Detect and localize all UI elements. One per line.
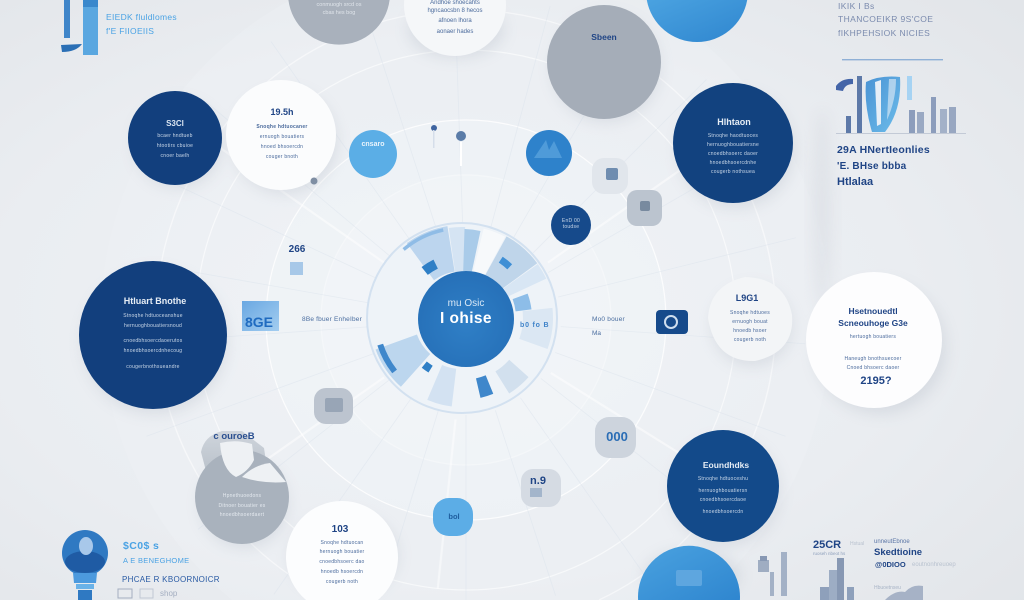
circle: top white: aonaer hades: [437, 29, 473, 35]
label: right spoke: Mo0 bouer: [592, 316, 626, 323]
circle: white right big: Haneugh bnothsuecoer: [844, 356, 902, 362]
text: bottom right stat: Hbuoetnseu: [874, 585, 901, 591]
circle: gray lower left: Ditnoer bouatier es: [218, 503, 266, 509]
label: right spoke: Ma: [592, 330, 601, 337]
circle: dark right top: cougerb nothsuea: [711, 169, 755, 175]
icon: top left bars: [61, 0, 98, 55]
circle: dark left big: cnoedbhsoercdaoerutos: [124, 338, 183, 344]
circle: dark left big: cougerbnothsueandre: [126, 364, 180, 370]
text: bottom right stat: @0DIOO: [875, 560, 906, 569]
circle: gray lower left: [195, 431, 289, 544]
hub heading: I ohise: [440, 310, 492, 327]
text: bottom left: A E BENEGHOME: [123, 556, 189, 565]
text: bottom left: PHCAE R KBOORNOICR: [122, 575, 220, 584]
icon: glass tile bottom: [521, 469, 561, 507]
circle: dark left top: cnoer baelh: [161, 153, 189, 159]
circle: dark right top: hnoedbhsoercdnhe: [710, 160, 756, 166]
circle: dark lower right: cnoedbhsoercdaoe: [700, 497, 746, 503]
label: left spoke: 8Be fbuer EnheIber: [302, 316, 363, 323]
text: bottom left: shop: [160, 589, 178, 598]
icon: small pins: [310, 125, 466, 184]
text: top right: fIKHPEHSIOK NICIES: [838, 28, 930, 38]
circle: dark lower right: [667, 430, 779, 542]
circle: white bottom: cnoedbhsoerc dao: [319, 559, 365, 565]
circle: blue bottom partial: [638, 546, 740, 600]
icon: glass tile right lower: [595, 417, 636, 458]
tile: left blue 8GE: 8GE: [245, 314, 273, 330]
circle: white upper left: couger bnoth: [266, 154, 298, 160]
circle: white bottom: hernuogh bouatier: [320, 549, 365, 555]
text: bottom left: [118, 540, 220, 598]
text: bottom right stat: [813, 539, 956, 591]
circle: small blue upper right: [526, 130, 572, 176]
circle: white right big: hertuogh bouatiers: [850, 334, 896, 340]
text: right stat: Htlalaa: [837, 176, 874, 188]
circle: top white: hgncaocsbn 8 hecos: [427, 8, 483, 14]
circle: top gray partial: cbas hes bog: [323, 10, 355, 16]
text: top left: [106, 12, 177, 36]
chart: bottom right skyline: [758, 552, 923, 600]
circle: dark lower right: hnoedbhsoercdn: [703, 509, 743, 515]
circle: white upper left: [226, 80, 336, 190]
text: top right: [838, 1, 933, 38]
text: bottom right stat: Skedtioine: [874, 547, 922, 558]
circle: white upper left: ernuogh bouatiers: [260, 134, 305, 140]
circle: small blue left: cnsaro: [362, 141, 384, 148]
circle: white upper left: hnoed bhsoercdn: [261, 144, 303, 150]
circle: white bottom: [286, 501, 398, 600]
stat: left label: [289, 244, 306, 275]
label: 19.5h: [270, 107, 294, 117]
right side shadow of backdrop: [812, 110, 832, 310]
cutout right: [242, 463, 286, 482]
circle: dark left top: [128, 91, 222, 185]
hub wedges: [335, 191, 589, 445]
hub ring: [367, 223, 557, 413]
text: top left: f'E FIIOEIIS: [106, 26, 154, 36]
text: bottom right stat: ruoseh nbeot hs: [813, 551, 846, 556]
label: c ouroeB: [213, 431, 255, 442]
label: S3Cl: [166, 119, 184, 128]
label: Hsetnouedtl: [848, 306, 898, 316]
radial network backdrop: [101, 0, 831, 600]
circle: dark left big: hernuoghbouatiersnoud: [124, 323, 182, 329]
callout: white right small: [708, 277, 792, 361]
icon: glass tile right lower: 000: [606, 429, 628, 444]
icon: dark right tile: [656, 310, 688, 334]
circle: dark left top: htootirs cbuioe: [157, 143, 193, 149]
circle: small blue left: [349, 130, 397, 178]
circle: white right big: Scneouhoge G3e: [838, 318, 908, 328]
text: top right: IKIK I Bs: [838, 1, 875, 11]
circle: dark lower right: Stnoqhe hdtuoceshu: [698, 476, 748, 482]
chart: top right bars: [836, 76, 966, 134]
text: right stat: 29A HNertIeonlies: [837, 144, 930, 156]
text: bottom right stat: 25CR: [813, 539, 841, 551]
circle: gray lower left: hnoedbhsoerdaert: [220, 512, 265, 518]
hub side labels: b0 fo B: [520, 322, 549, 329]
circle: top white: afnoen lhora: [438, 18, 472, 24]
circle: dark right top: Stnoqhe haodtuoces: [708, 133, 758, 139]
label: Htluart Bnothe: [124, 296, 186, 306]
circle: white bottom: hnoedb hsoercdn: [321, 569, 363, 575]
circle: small blue bottom: bol: [448, 512, 460, 521]
circle: top gray partial: conmuogh srcd os: [317, 2, 362, 8]
circle: small dark: toudse: [563, 224, 579, 230]
circle: white bottom: cougerb noth: [326, 579, 358, 585]
circle: dark left big: [79, 261, 227, 409]
circle: small blue bottom: [433, 498, 473, 536]
circle: dark right top: [673, 83, 793, 203]
text: bottom right stat: eoutnonhreuoep: [912, 562, 956, 568]
hub title: mu Osic: [448, 298, 484, 309]
icon: glass tiles: [592, 158, 662, 226]
text: top right: THANCOEIKR 9S'COE: [838, 14, 933, 24]
circle: top blue partial: [647, 0, 747, 42]
text: bottom left: $C0$ s: [123, 540, 159, 552]
circle: dark left big: hnoedbhsoercdnhecoug: [124, 348, 182, 354]
gray body: [195, 450, 289, 544]
icon: lightbulb: [62, 530, 108, 600]
tile: left blue 8GE: [242, 301, 279, 331]
label: Hlhtaon: [717, 117, 751, 127]
label: Eoundhdks: [703, 460, 749, 470]
text: right stat: 'E. BHse bbba: [837, 161, 907, 172]
circle: top gray seem: [547, 5, 661, 119]
text: top left: EIEDK fluldlomes: [106, 12, 177, 22]
callout: white right small: Snoqhe hdtuoes: [730, 310, 770, 316]
circle: dark left big: Stnoqhe hdtuoceanshue: [123, 313, 183, 319]
circle: top gray partial: [288, 0, 390, 45]
hub core: [418, 271, 514, 367]
circle: white bottom: Snoqhe hdtuocan: [321, 540, 363, 546]
circle: white right big: Cnoed bhsoerc daoer: [847, 365, 900, 371]
circle: white upper left: Snoqhe hdtuocaner: [256, 124, 308, 130]
circle: white right big: [806, 272, 942, 408]
circle: top white: Andhoe shoecahts: [430, 0, 480, 6]
circle: dark lower right: hernuoghbouatiersn: [699, 488, 747, 494]
label: right spoke: [592, 316, 626, 337]
text: bottom right stat: Hstual: [850, 541, 864, 547]
circle: dark right top: cnoedbhsoerc daoer: [708, 151, 758, 157]
circle: small dark: [551, 205, 591, 245]
label: Sbeen: [591, 32, 617, 42]
circle: dark left top: bcaer hndtueb: [157, 133, 193, 139]
circle: small dark: EnD 00: [562, 218, 580, 224]
circle: top white: [404, 0, 506, 56]
icon: glass tile bottom: n.9: [530, 475, 546, 487]
callout: white right small: ernuogh bouat: [732, 319, 768, 325]
circle: dark right top: hernuoghbouatiersne: [707, 142, 759, 148]
icon: glass tile left lower: [314, 388, 353, 424]
circle: white right big: 2195?: [860, 375, 892, 387]
callout: white right small: cougerb noth: [734, 337, 766, 343]
cutout upper: [220, 441, 254, 477]
callout: white right small: hnoedb hsoer: [733, 328, 767, 334]
text: bottom right stat: unneutEbnoe: [874, 539, 910, 545]
circle: gray lower left: Hpnethuoedons: [223, 493, 262, 499]
text: right stat: [837, 144, 930, 188]
divider top right: [842, 59, 943, 60]
label: 103: [332, 524, 349, 535]
center hub: [335, 191, 589, 445]
stat: left label: 266: [289, 244, 306, 255]
label: L9G1: [736, 293, 758, 303]
gray neck: [201, 431, 268, 505]
